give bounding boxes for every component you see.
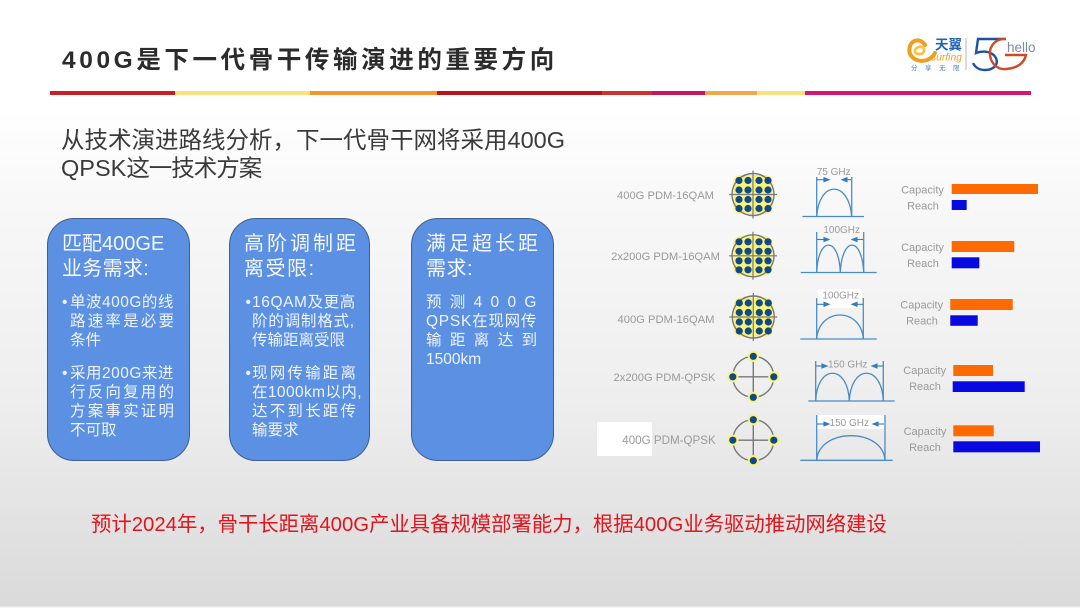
row: 400G PDM-QPSK 150 GHz: Reach [909, 442, 941, 454]
bullet text: • [62, 365, 67, 382]
row: 400G PDM-16QAM 100GHz: Capacity [900, 300, 944, 312]
row: 400G PDM-16QAM 100GHz: 400G PDM-16QAM [618, 314, 714, 326]
bullet text: 在1000km以内, [252, 384, 362, 401]
bullet text: 达不到长距传 [252, 403, 358, 420]
logo: 5G hello [973, 39, 1036, 70]
panel: 高阶调制距离受限 [229, 218, 370, 461]
panel heading: 满足超长距 [426, 233, 541, 255]
row: 400G PDM-QPSK 150 GHz: 150 GHz [830, 418, 869, 429]
bullet text: 条件 [70, 332, 101, 349]
bullet text: 输要求 [252, 422, 299, 439]
bullet text [62, 294, 176, 439]
logo wordmark: surfing [931, 52, 962, 64]
logo wordmark [911, 38, 967, 72]
row: 400G PDM-16QAM 100GHz: 100GHz [822, 290, 859, 302]
row: 2x200G PDM-16QAM 100GHz: 2x200G PDM-16QAM [611, 251, 720, 263]
panel heading [244, 233, 359, 280]
white spectrum label backgrounds [818, 289, 862, 308]
bullet text: • [246, 294, 251, 311]
chart: modulation comparison [597, 167, 1040, 466]
conclusion text: 预计2024年，骨干长距离400G产业具备规模部署能力，根据400G业务驱动推动网络建设 [91, 514, 887, 536]
bullet text: • [62, 294, 67, 311]
body text: 输距离达到 [426, 332, 546, 349]
logo: 5G hello: hello [1007, 40, 1036, 55]
panel heading: 高阶调制距 [244, 233, 359, 255]
row: 2x200G PDM-16QAM 100GHz: 100GHz [823, 225, 860, 236]
bullet text: 传输距离受限 [252, 332, 345, 349]
row: 400G PDM-16QAM 75 GHz: Reach [907, 200, 939, 212]
panel: 满足超长距需求 [411, 218, 554, 461]
row: 400G PDM-16QAM 75 GHz [617, 167, 1038, 218]
intro text: 从技术演进路线分析，下一代骨干网将采用400G [61, 127, 565, 153]
bullet text: 路速率是必要 [70, 313, 176, 330]
panel heading [426, 233, 541, 280]
row: 400G PDM-16QAM 100GHz: Reach [906, 316, 938, 328]
row: 2x200G PDM-QPSK 150 GHz: 150 GHz [828, 360, 867, 371]
logo wordmark: 分享无限 [911, 63, 967, 72]
row: 2x200G PDM-16QAM 100GHz: Capacity [901, 242, 944, 254]
intro text [61, 127, 565, 180]
bullet text: 采用200G来进 [70, 365, 174, 382]
row: 400G PDM-16QAM 75 GHz: 75 GHz [817, 167, 851, 178]
bullet text: 单波400G的线 [70, 294, 174, 311]
row: 2x200G PDM-QPSK 150 GHz: Capacity [903, 365, 947, 377]
bullet text: • [246, 365, 251, 382]
bullet text: 不可取 [70, 422, 117, 439]
intro text: QPSK这一技术方案 [61, 154, 261, 180]
title: 400G是下一代骨干传输演进的重要方向 [62, 47, 558, 74]
logo wordmark: 天翼 [935, 38, 962, 52]
bullet text: 16QAM及更高 [252, 294, 356, 311]
panel: 匹配400GE业务需求 [47, 218, 190, 461]
row: 400G PDM-QPSK 150 GHz: 400G PDM-QPSK [622, 434, 716, 447]
body text: 预测400G [426, 294, 545, 311]
row: 400G PDM-16QAM 75 GHz: Capacity [901, 184, 944, 196]
white label background [597, 422, 652, 456]
bullet text [246, 294, 362, 439]
panel heading: 离受限: [244, 258, 316, 280]
icon: surfing swirl [909, 40, 935, 61]
panel heading [62, 233, 164, 280]
row: 2x200G PDM-16QAM 100GHz [611, 225, 1014, 280]
row: 400G PDM-QPSK 150 GHz: Capacity [904, 426, 947, 438]
bullet text: 方案事实证明 [70, 403, 176, 420]
row: 400G PDM-16QAM 75 GHz: 400G PDM-16QAM [617, 190, 714, 202]
logo: Surfing and 5G hello [907, 38, 1036, 72]
body text: 1500km [426, 351, 481, 368]
row: 400G PDM-QPSK 150 GHz [622, 414, 1040, 466]
header rule [50, 91, 1031, 95]
panel heading: 需求: [426, 258, 473, 280]
row: 2x200G PDM-16QAM 100GHz: Reach [907, 258, 939, 270]
bullet text: 现网传输距离 [252, 365, 358, 382]
panel heading: 匹配400GE [62, 233, 164, 255]
row: 2x200G PDM-QPSK 150 GHz: Reach [909, 381, 941, 393]
row: 400G PDM-16QAM 100GHz [618, 290, 1013, 341]
body text [426, 294, 546, 368]
bullet text: 阶的调制格式, [252, 313, 355, 330]
panel heading: 业务需求: [62, 258, 149, 280]
row: 2x200G PDM-QPSK 150 GHz: 2x200G PDM-QPSK [614, 372, 716, 384]
body text: QPSK在现网传 [426, 313, 537, 330]
bullet text: 行反向复用的 [70, 384, 176, 401]
row: 2x200G PDM-QPSK 150 GHz [614, 351, 1025, 403]
